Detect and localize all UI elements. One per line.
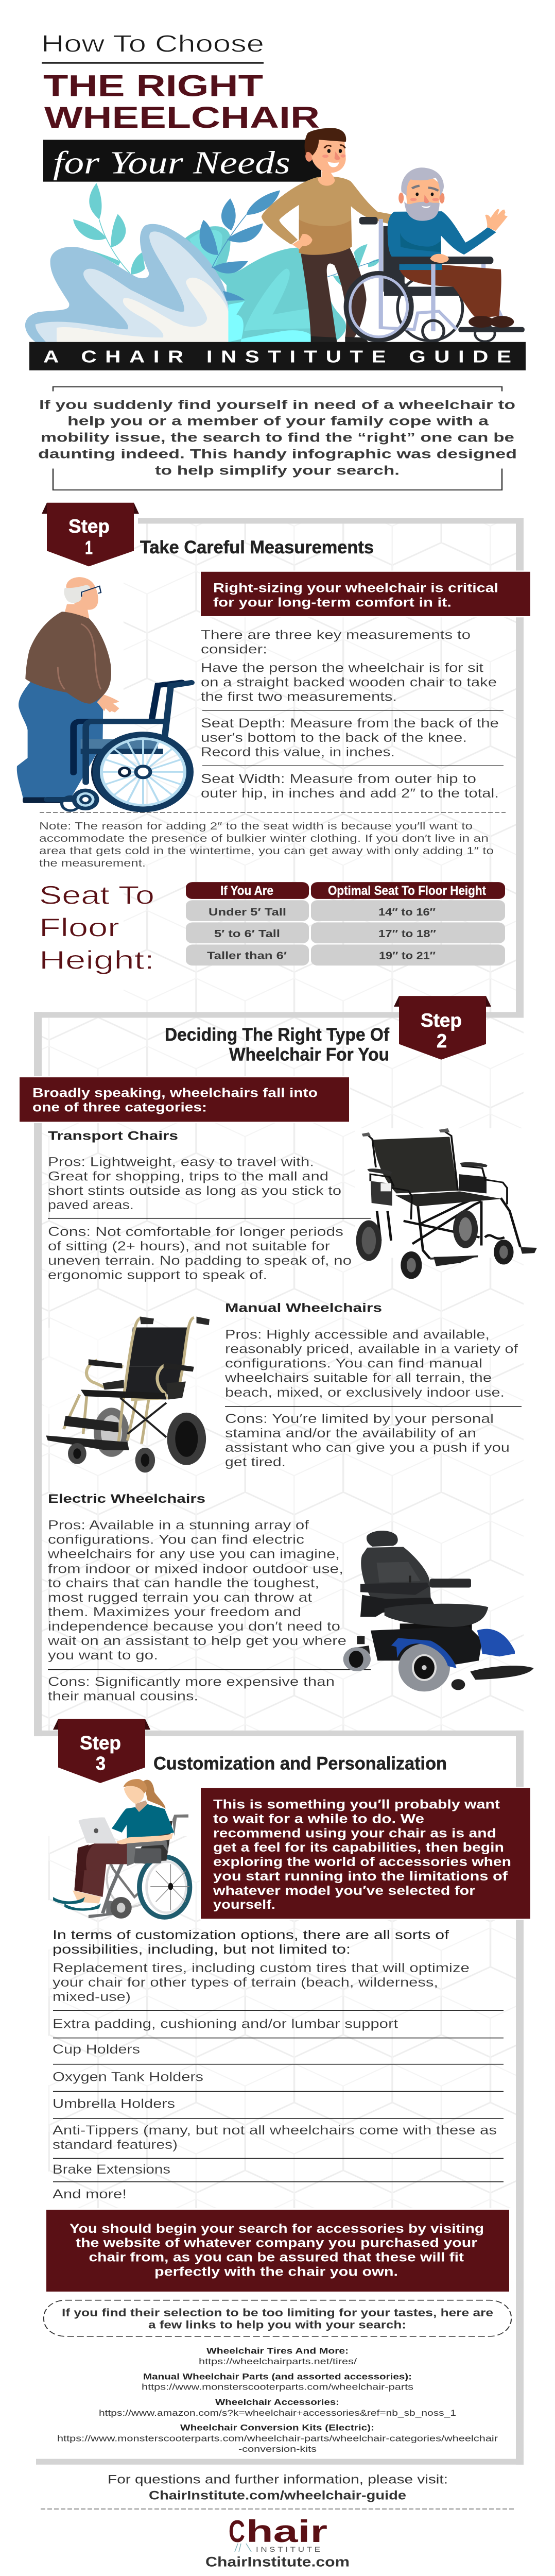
logo — [205, 2514, 350, 2570]
electric wheelchairs text: to chairs that can handle the toughest, — [48, 1576, 319, 1590]
customization options list: mixed-use) — [53, 1990, 131, 2004]
measurement instructions: Seat Width: Measure from outer hip to — [201, 772, 476, 786]
customization options list — [53, 1928, 504, 2201]
transport chairs text: Transport Chairs — [48, 1128, 178, 1143]
measurement instructions: the first two measurements. — [201, 689, 397, 704]
customization options list: Oxygen Tank Holders — [53, 2070, 203, 2084]
intro text block: mobility issue, the search to find the “right” one can be — [41, 431, 514, 445]
step 3 title: Customization and Personalization — [153, 1754, 447, 1774]
seat height table — [186, 882, 505, 965]
manual wheelchairs text: Cons: You′re limited by your personal — [225, 1412, 494, 1426]
manual wheelchairs text: beach, mixed, or exclusively indoor use. — [225, 1385, 505, 1399]
transport chairs text: Pros: Lightweight, easy to travel with. — [48, 1155, 314, 1169]
customization options list: standard features) — [53, 2138, 178, 2151]
manual wheelchairs text — [224, 1301, 522, 1469]
electric wheelchairs text: Pros: Available in a stunning array of — [48, 1518, 309, 1532]
step 2 title: Deciding The Right Type Of — [165, 1025, 390, 1045]
step 2 badge: 2 — [437, 1030, 447, 1052]
measurement instructions: outer hip, in inches and add 2″ to the total. — [201, 786, 499, 800]
illustration: man measuring chair — [17, 577, 192, 810]
measurement instructions: Record this value, in inches. — [201, 745, 395, 759]
hero illustration: standing man — [262, 128, 392, 342]
note — [39, 812, 506, 869]
photo: manual wheelchair — [46, 1317, 210, 1472]
logo: INSTITUTE — [256, 2546, 320, 2553]
callout: categories — [19, 1076, 350, 1123]
hero illustration: plants — [25, 183, 380, 342]
electric wheelchairs text: configurations. You can find electric — [48, 1533, 304, 1547]
resource links: Wheelchair Tires And More: — [206, 2346, 349, 2356]
logo: ChairInstitute.com — [205, 2554, 350, 2570]
hero heading — [41, 31, 321, 182]
dashed pill note — [44, 2300, 511, 2336]
callout: right-sizing: for your long-term comfort in it. — [213, 596, 452, 609]
customization options list: Anti-Tippers (many, but not all wheelchairs come with these as — [53, 2123, 497, 2137]
heading line: wheelchair: WHEELCHAIR — [44, 100, 320, 134]
manual wheelchairs text: assistant who can give you a push if you — [225, 1440, 510, 1454]
footer text: ChairInstitute.com/wheelchair-guide — [149, 2488, 406, 2502]
intro text block: daunting indeed. This handy infographic was designed — [38, 447, 517, 461]
resource links: https://wheelchairparts.net/tires/ — [199, 2357, 357, 2367]
callout: right-sizing — [200, 570, 531, 617]
callout: wait: This is something you′ll probably want — [213, 1797, 500, 1811]
measurement instructions: consider: — [201, 642, 267, 656]
step 1 title: Take Careful Measurements — [140, 537, 374, 557]
footer text: For questions and further information, please visit: — [108, 2472, 448, 2486]
step 3 badge — [53, 1719, 150, 1783]
callout: categories: one of three categories: — [32, 1100, 207, 1114]
intro text block: If you suddenly find yourself in need of a wheelchair to — [39, 398, 515, 412]
callout: wait: to wait for a while to do. We — [213, 1811, 424, 1826]
customization options list: In terms of customization options, there are all sorts of — [53, 1928, 449, 1942]
customization options list: And more! — [53, 2187, 127, 2201]
intro text block: to help simplify your search. — [155, 463, 400, 478]
step 3 badge: 3 — [96, 1753, 106, 1774]
note: Note: The reason for adding 2″ to the seat width is because you′ll want to — [39, 820, 473, 832]
seat height table: 5′ to 6′ Tall — [214, 928, 280, 939]
measurement instructions: Seat Depth: Measure from the back of the — [201, 716, 499, 730]
manual wheelchairs text: Manual Wheelchairs — [225, 1301, 382, 1315]
photo: transport chair — [356, 1128, 537, 1279]
note: the measurement. — [39, 857, 146, 869]
manual wheelchairs text: stamina and/or the availability of an — [225, 1426, 476, 1440]
resource links: https://www.monsterscooterparts.com/wheelchair-parts — [142, 2382, 413, 2392]
electric wheelchairs text: Cons: Significantly more expensive than — [48, 1675, 335, 1689]
resource links: https://www.amazon.com/s?k=wheelchair+accessories&ref=nb_sb_noss_1 — [99, 2409, 456, 2418]
callout: wait: yourself. — [213, 1897, 275, 1911]
step 3 badge: Step — [80, 1733, 121, 1754]
manual wheelchairs text: Pros: Highly accessible and available, — [225, 1327, 490, 1342]
callout: wait: recommend using your chair as is and — [213, 1826, 496, 1840]
electric wheelchairs text: Electric Wheelchairs — [48, 1492, 205, 1505]
transport chairs text: uneven terrain. No padding to speak of, no — [48, 1253, 352, 1267]
resource links: Wheelchair Conversion Kits (Electric): — [180, 2423, 374, 2433]
electric wheelchairs text: their manual cousins. — [48, 1689, 198, 1703]
manual wheelchairs text: get tired. — [225, 1455, 286, 1469]
logo: C — [229, 2514, 245, 2549]
callout: wait: you start running into the limitations of — [213, 1869, 508, 1883]
step 1 badge — [42, 503, 139, 566]
logo: hair — [246, 2514, 327, 2549]
seat height table: Under 5′ Tall — [209, 906, 286, 918]
intro text block — [38, 387, 517, 490]
seat to floor height heading: Floor — [39, 913, 119, 942]
electric wheelchairs text — [47, 1492, 371, 1703]
callout: categories: Broadly speaking, wheelchairs fall into — [32, 1086, 318, 1100]
callout: begin your search: You should begin your search for accessories by visiting — [70, 2222, 484, 2235]
resource links: https://www.monsterscooterparts.com/wheelchair-parts/wheelchair-categories/wheelchair — [57, 2434, 498, 2444]
transport chairs text: paved areas. — [48, 1198, 134, 1212]
seat height table: Optimal Seat To Floor Height — [328, 884, 486, 897]
resource links: -conversion-kits — [238, 2445, 317, 2454]
footer text — [41, 2472, 514, 2509]
measurement instructions: user′s bottom to the back of the knee. — [201, 731, 467, 744]
resource links: Wheelchair Accessories: — [215, 2398, 339, 2408]
panel backgrounds and frame — [34, 518, 524, 2465]
electric wheelchairs text: most rugged terrain you can throw at — [48, 1590, 312, 1604]
customization options list: Brake Extensions — [53, 2162, 170, 2176]
electric wheelchairs text: from indoor or mixed indoor outdoor use, — [48, 1562, 343, 1576]
dashed pill note: If you find their selection to be too limiting for your tastes, here are — [62, 2307, 493, 2319]
callout: wait — [200, 1787, 531, 1920]
resource links — [57, 2346, 498, 2454]
measurement instructions: There are three key measurements to — [201, 628, 471, 642]
step 2 badge — [394, 996, 491, 1060]
customization options list: Replacement tires, including custom tires that will optimize — [53, 1961, 470, 1975]
guide banner — [29, 342, 526, 370]
customization options list: Extra padding, cushioning and/or lumbar support — [53, 2016, 398, 2031]
electric wheelchairs text: independence because you don′t need to — [48, 1619, 340, 1633]
electric wheelchairs text: wheelchairs for any use you can imagine, — [47, 1547, 340, 1561]
heading line: how to choose: How To Choose — [41, 31, 264, 57]
callout: wait: whatever model you′ve selected for — [213, 1884, 475, 1897]
dashed pill note: a few links to help you with your search: — [148, 2319, 406, 2331]
callout: begin your search — [46, 2210, 509, 2292]
transport chairs text — [48, 1128, 371, 1282]
manual wheelchairs text: configurations. You can find manual — [225, 1356, 482, 1370]
transport chairs text: of sitting (2+ hours), and not suitable for — [48, 1239, 330, 1253]
seat to floor height heading — [39, 880, 154, 975]
callout: begin your search: perfectly with the chair you own. — [154, 2265, 398, 2279]
step 2 badge: Step — [421, 1010, 462, 1031]
seat height table: 17″ to 18″ — [378, 928, 436, 939]
measurement instructions — [201, 628, 504, 800]
callout: wait: get a feel for its capabilities, then begin — [213, 1840, 504, 1855]
transport chairs text: Cons: Not comfortable for longer periods — [48, 1225, 343, 1239]
seat height table: If You Are — [220, 884, 273, 897]
step 2 title — [165, 1025, 390, 1064]
manual wheelchairs text: reasonably priced, available in a variety of — [225, 1342, 518, 1356]
heading line: the right: THE RIGHT — [43, 69, 263, 103]
customization options list: Umbrella Holders — [53, 2096, 175, 2111]
step 1 badge: 1 — [85, 537, 93, 558]
transport chairs text: ergonomic support to speak of. — [48, 1268, 267, 1282]
heading rule — [42, 62, 264, 64]
callout: begin your search: the website of whatever company you purchased your — [76, 2236, 477, 2250]
resource links: Manual Wheelchair Parts (and assorted accessories): — [143, 2372, 412, 2382]
manual wheelchairs text: wheelchairs suitable for all terrain, the — [224, 1370, 492, 1385]
script banner: for Your Needs — [53, 145, 290, 181]
electric wheelchairs text: wait on an assistant to help get you where — [47, 1634, 346, 1648]
measurement instructions: on a straight backed wooden chair to take — [201, 675, 497, 689]
guide banner: A CHAIR INSTITUTE GUIDE — [43, 348, 511, 367]
electric wheelchairs text: them. Maximizes your freedom and — [48, 1605, 301, 1619]
seat to floor height heading: Seat To — [39, 880, 154, 910]
step 2 title: Wheelchair For You — [229, 1045, 389, 1064]
customization options list: possibilities, including, but not limited to: — [53, 1942, 351, 1956]
electric wheelchairs text: you want to go. — [48, 1648, 158, 1662]
callout: right-sizing: Right-sizing your wheelchair is critical — [213, 581, 498, 595]
callout: wait: exploring the world of accessories when — [213, 1855, 511, 1869]
transport chairs text: short stints outside as long as you stick to — [48, 1183, 341, 1198]
transport chairs text: Great for shopping, trips to the mall and — [48, 1169, 328, 1183]
illustration: woman in wheelchair with laptop — [53, 1779, 190, 1919]
measurement instructions: Have the person the wheelchair is for sit — [201, 660, 483, 675]
seat height table: Taller than 6′ — [207, 950, 287, 961]
intro text block: help you or a member of your family cope with a — [67, 414, 489, 428]
customization options list: Cup Holders — [53, 2042, 140, 2056]
seat height table: 14″ to 16″ — [378, 906, 436, 918]
note: accommodate the presence of bulkier winter clothing. If you don′t live in an — [39, 833, 489, 844]
step 1 badge: Step — [68, 516, 110, 537]
customization options list: your chair for other types of terrain (beach, wilderness, — [53, 1975, 438, 1989]
hero illustration: man in wheelchair — [346, 167, 525, 342]
seat height table: 19″ to 21″ — [379, 950, 436, 961]
callout: begin your search: chair from, as you can be assured that these will fit — [89, 2250, 464, 2264]
seat to floor height heading: Height: — [39, 946, 154, 975]
photo: electric wheelchair — [343, 1531, 534, 1691]
note: area that gets cold in the wintertime, you can get away with only adding 1″ to — [39, 845, 494, 856]
